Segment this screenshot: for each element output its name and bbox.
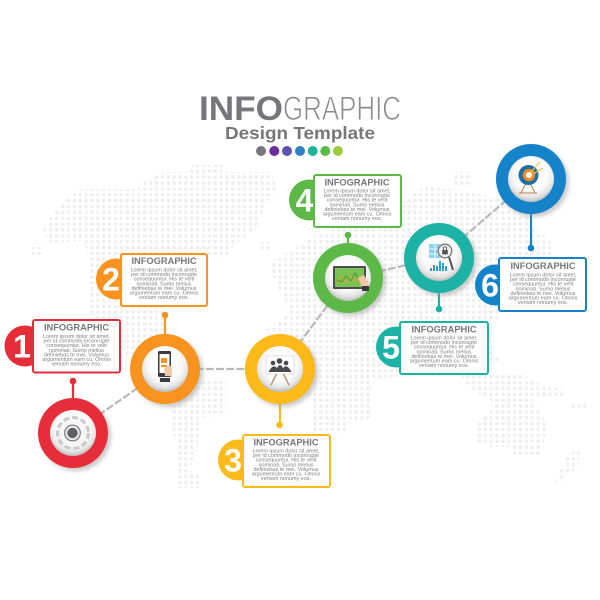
step 4 text box: nominati. Sumo melius <box>329 202 385 208</box>
step 2 node <box>130 312 203 407</box>
step 4 text box: Lorem ipsum dolor sit amet, <box>323 188 391 194</box>
title: INFO <box>199 90 283 128</box>
step 1 text box: nominati. Sumo melius <box>49 348 104 354</box>
title <box>199 90 401 128</box>
world map dot background <box>32 165 586 488</box>
step 3 node <box>245 334 318 428</box>
step 3 text box <box>218 435 330 487</box>
subtitle: Design Template <box>225 123 375 143</box>
step 5 text box: argumentum eam cu. Omnis <box>410 358 479 364</box>
step 6 text box: per id commodo inconrupte <box>510 277 576 283</box>
step 4 text box: consequuntur. His te velit <box>327 198 388 204</box>
step 4 text box: definiebas te mei. Volumus <box>325 207 390 213</box>
step 2 text box: argumentum eam cu. Omnis <box>130 290 199 296</box>
step 3 text box: 3 <box>224 442 242 478</box>
step 6 text box: argumentum eam cu. Omnis <box>509 296 578 302</box>
step 1 text box: consequuntur. His te velit <box>46 343 107 349</box>
step 5 text box: Lorem ipsum dolor sit amet, <box>410 336 478 342</box>
step 2 text box: 2 <box>102 262 120 298</box>
icon: presentation easel <box>266 356 294 385</box>
step 1 text box: 1 <box>13 328 31 364</box>
step 6 text box <box>475 258 586 311</box>
icon: data lock magnifier <box>429 244 453 271</box>
icon: tablet with chart <box>333 266 369 291</box>
step 3 text box: Lorem ipsum dolor sit amet, <box>252 448 320 454</box>
step 4 text box: INFOGRAPHIC <box>324 178 390 188</box>
step 2 text box: veniam nonumy eos. <box>139 295 190 301</box>
step 1 text box: veniam nonumy eos. <box>51 362 102 368</box>
step 1 text box <box>4 320 120 372</box>
step 2 text box: per id commodo inconrupte <box>131 272 197 278</box>
step 1 text box: Lorem ipsum dolor sit amet, <box>43 334 111 340</box>
step 6 text box: 6 <box>481 268 499 304</box>
step 3 text box: consequuntur. His te velit <box>256 458 317 464</box>
step 5 text box: consequuntur. His te velit <box>414 345 475 351</box>
step 3 text box: argumentum eam cu. Omnis <box>252 472 321 478</box>
step 5 text box: nominati. Sumo melius <box>416 349 472 355</box>
step 5 text box: veniam nonumy eos. <box>419 363 470 369</box>
step 1 node <box>38 378 111 471</box>
step 2 text box: nominati. Sumo melius <box>136 281 192 287</box>
step 5 text box: per id commodo inconrupte <box>411 340 477 346</box>
step 5 text box <box>376 322 488 374</box>
step 3 text box: per id commodo inconrupte <box>253 453 319 459</box>
step 4 text box: per id commodo inconrupte <box>324 193 390 199</box>
step 1 text box: argumentum eam cu. Omnis <box>42 357 111 363</box>
step 6 node <box>496 144 569 251</box>
title: GRAPHIC <box>283 90 401 128</box>
step 2 text box: Lorem ipsum dolor sit amet, <box>130 268 198 274</box>
step 1 text box: per id commodo inconrupte <box>44 339 109 345</box>
step 5 text box: definiebas te mei. Volumus <box>412 354 477 360</box>
icon: gear <box>58 418 88 448</box>
step 4 text box <box>289 175 401 227</box>
step 4 node <box>313 232 386 316</box>
step 5 node <box>404 223 477 312</box>
step 4 text box: veniam nonumy eos. <box>332 216 383 222</box>
step 5 text box: 5 <box>382 330 400 366</box>
dashed timeline connector <box>73 179 531 433</box>
step 6 text box: consequuntur. His te velit <box>513 282 574 288</box>
step 4 text box: 4 <box>296 182 314 218</box>
step 6 text box: Lorem ipsum dolor sit amet, <box>509 272 577 278</box>
step 3 text box: nominati. Sumo melius <box>258 462 314 468</box>
step 6 text box: definiebas te mei. Volumus <box>511 291 576 297</box>
step 2 text box: definiebas te mei. Volumus <box>132 286 197 292</box>
step 4 text box: argumentum eam cu. Omnis <box>323 212 392 218</box>
step 3 text box: INFOGRAPHIC <box>253 438 319 448</box>
icon: target with arrows <box>518 162 543 193</box>
title colour dots <box>256 146 343 156</box>
step 3 text box: definiebas te mei. Volumus <box>254 467 319 473</box>
step 5 text box: INFOGRAPHIC <box>411 324 477 334</box>
step 6 text box: INFOGRAPHIC <box>510 261 576 271</box>
step 1 text box: definiebas te mei. Volumus <box>44 352 109 358</box>
step 6 text box: veniam nonumy eos. <box>518 300 569 306</box>
step 2 text box: INFOGRAPHIC <box>131 256 197 266</box>
step 1 text box: INFOGRAPHIC <box>44 322 109 332</box>
step 3 text box: veniam nonumy eos. <box>261 476 312 482</box>
icon: phone in hand <box>158 351 172 382</box>
step 2 text box <box>96 254 207 306</box>
step 2 text box: consequuntur. His te velit <box>134 277 195 283</box>
step 6 text box: nominati. Sumo melius <box>515 286 571 292</box>
